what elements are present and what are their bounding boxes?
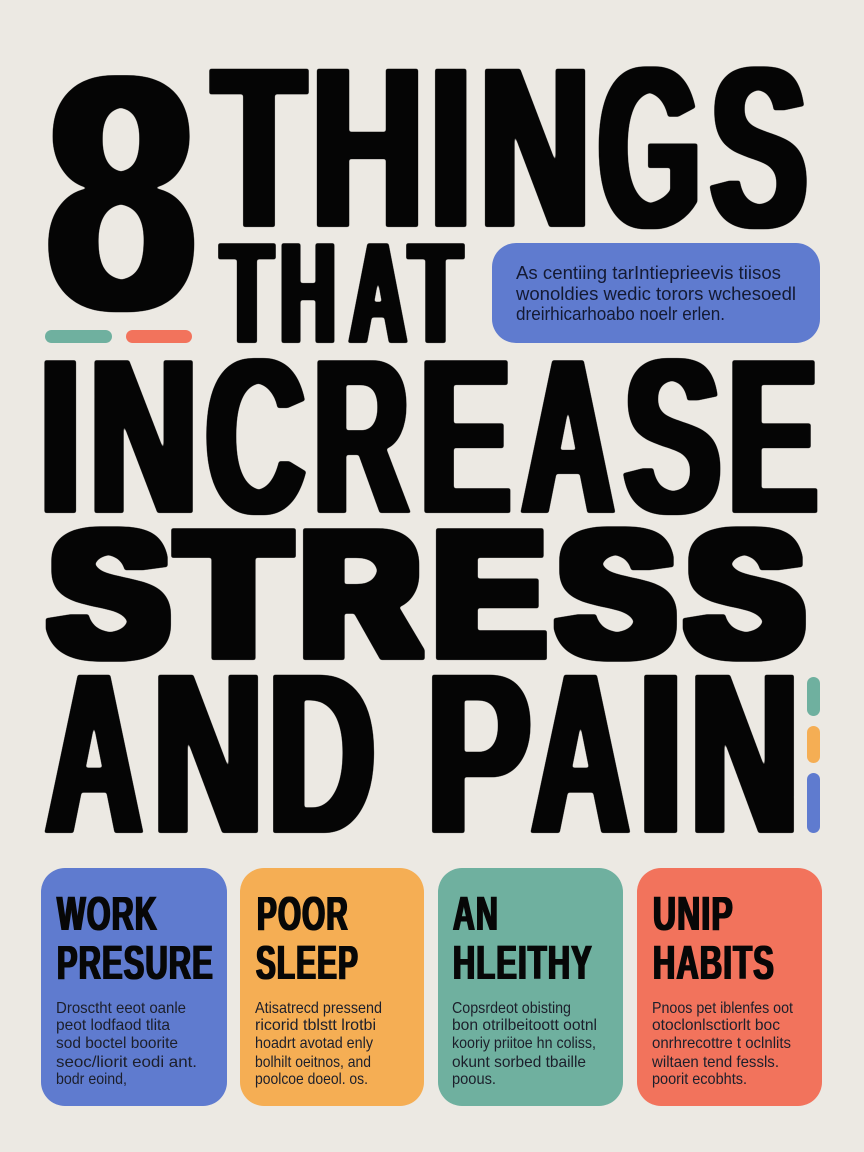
- title: STRESS: R: [301, 495, 419, 693]
- title: THINGS: H: [312, 19, 424, 276]
- title: THINGS: G: [598, 19, 701, 276]
- title: INCREASE: C: [206, 313, 305, 561]
- callout: [492, 243, 820, 343]
- text block: unhealthy: kooriy priitoe hn coliss,: [452, 1035, 596, 1052]
- text block: poor sleep: poolcoe doeol. os.: [255, 1071, 368, 1088]
- title: STRESS: S: [686, 495, 804, 693]
- accent pills beside AND PAIN: [807, 677, 820, 833]
- text block: work pressure: seoc/liorit eodi ant.: [56, 1054, 197, 1071]
- title: THINGS: S: [710, 19, 807, 276]
- text block: unhealthy: bon otrilbeitoott ootnl: [452, 1017, 597, 1034]
- callout: wonoldies wedic torors wchesoedl: [515, 284, 796, 304]
- text block: work pressure: sod boctel boorite: [56, 1035, 178, 1052]
- title: numeral 8: 8: [46, 6, 197, 380]
- title: THAT: T: [221, 212, 273, 374]
- title: THINGS: N: [480, 19, 590, 276]
- text block: poor sleep: [255, 1000, 382, 1088]
- text block: poor sleep: ricorid tblstt lrotbi: [255, 1017, 376, 1034]
- title: INCREASE: A: [522, 313, 614, 561]
- heading: poor sleep: [256, 888, 359, 990]
- heading: habits: HABITS: [653, 937, 775, 990]
- title: THINGS: T: [213, 19, 305, 276]
- panel: poor sleep: [240, 868, 424, 1106]
- heading: work pressure: [57, 888, 214, 990]
- heading: habits: UNIP: [653, 888, 734, 941]
- panel: habits: [637, 868, 822, 1106]
- text block: habits: Pnoos pet iblenfes oot: [652, 1000, 793, 1017]
- text block: unhealthy: okunt sorbed tbaille: [452, 1054, 586, 1071]
- title: THAT: A: [350, 212, 406, 374]
- title: AND PAIN: D: [268, 625, 375, 882]
- title: THINGS: I: [430, 19, 471, 276]
- text block: habits: otoclonlsctiorlt boc: [652, 1017, 780, 1034]
- text block: poor sleep: hoadrt avotad enly: [255, 1035, 373, 1052]
- text block: unhealthy: Copsrdeot obisting: [452, 1000, 571, 1017]
- title: AND PAIN: I: [638, 625, 683, 882]
- text block: work pressure: peot lodfaod tlita: [56, 1017, 170, 1034]
- accent pills under the 8: [45, 330, 192, 343]
- heading: work pressure: WORK: [57, 888, 158, 941]
- title: INCREASE: N: [89, 313, 198, 561]
- title: AND PAIN: A: [532, 625, 629, 882]
- title: AND PAIN: P: [427, 625, 531, 882]
- heading: habits: [653, 888, 775, 990]
- text block: poor sleep: Atisatrecd pressend: [255, 1000, 382, 1017]
- text block: poor sleep: bolhilt oeitnos, and: [255, 1054, 371, 1071]
- title: [39, 6, 818, 882]
- title: STRESS: T: [178, 495, 289, 693]
- callout: dreirhicarhoabo noelr erlen.: [516, 304, 725, 324]
- title: INCREASE: S: [624, 313, 721, 561]
- text block: habits: [651, 1000, 793, 1088]
- text block: habits: wiltaen tend fessls.: [651, 1054, 779, 1071]
- heading: work pressure: PRESURE: [57, 937, 214, 990]
- title: INCREASE: I: [39, 313, 81, 561]
- heading: unhealthy: HLEITHY: [453, 937, 593, 990]
- title: THAT: H: [280, 212, 336, 374]
- text block: unhealthy: [452, 1000, 597, 1088]
- callout: As centiing tarIntieprieevis tiisos: [516, 263, 781, 283]
- heading: unhealthy: AN: [453, 888, 499, 941]
- text block: work pressure: bodr eoind,: [56, 1071, 127, 1088]
- title: INCREASE: R: [314, 313, 409, 561]
- text block: habits: poorit ecobhts.: [652, 1071, 747, 1088]
- panel: work pressure: [41, 868, 227, 1106]
- text block: habits: onrhrecottre t oclnlits: [652, 1035, 791, 1052]
- title: THAT: T: [409, 212, 462, 374]
- heading: poor sleep: SLEEP: [256, 937, 359, 990]
- title: AND PAIN: N: [153, 625, 263, 882]
- title: STRESS: S: [49, 495, 169, 693]
- text block: work pressure: Drosctht eeot oanle: [56, 1000, 186, 1017]
- title: AND PAIN: N: [690, 625, 799, 882]
- title: INCREASE: E: [420, 313, 511, 561]
- title: STRESS: S: [558, 495, 675, 693]
- title: AND PAIN: A: [46, 625, 142, 882]
- text block: work pressure: [56, 1000, 197, 1088]
- text block: unhealthy: poous.: [452, 1071, 496, 1088]
- heading: unhealthy: [453, 888, 593, 990]
- title: STRESS: E: [434, 495, 544, 693]
- panel: unhealthy: [438, 868, 623, 1106]
- heading: poor sleep: POOR: [257, 888, 349, 941]
